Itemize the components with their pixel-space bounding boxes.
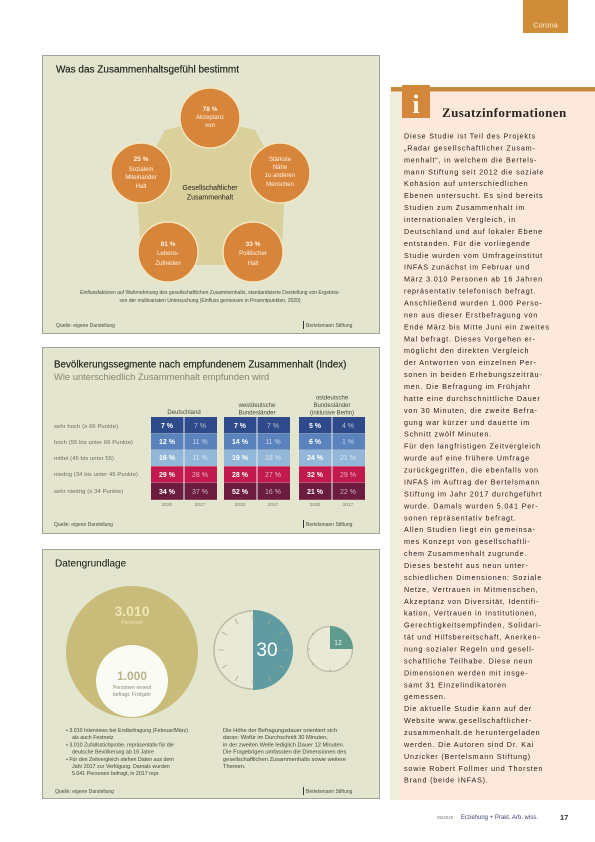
body text: schiedlichen Dimensionen: Soziale [404,573,542,582]
source: Quelle: eigene Darstellung [54,522,113,528]
circle: bottom left: 81 % [161,241,176,248]
body text: Deutschland und auf lokaler Ebene [404,227,543,236]
circle: left: 25 % [134,156,149,163]
circle: bottom right: 33 % [246,241,261,248]
body text: zusammenhalt.de heruntergeladen [404,728,540,737]
clock: 12 minutes: 12 [334,640,342,647]
nested circles: sample sizes: Personen erneut [113,685,152,691]
body text: Stiftung im Jahr 2017 durchgeführt [404,489,542,498]
column group: westdeutsche Bundesländer [224,403,290,508]
column group: Deutschland: 37 % [192,489,208,496]
column group: westdeutsche Bundesländer: 27 % [265,472,281,479]
body text: möglicht den direkten Vergleich [404,346,529,355]
body text: Ebenen untersucht. Es sind bereits [404,191,543,200]
clock: 12 minutes [307,626,353,672]
panel: Zusatzinformationen [390,85,595,800]
column group: westdeutsche Bundesländer: 52 % [232,489,249,496]
icon: info [402,85,430,119]
circle: right [250,143,310,203]
body text: gemessen. [404,692,447,701]
circle: right: Nähe [273,165,288,171]
body text: nung sozialer Regeln und gesell- [404,644,535,653]
duration note: in der zweiten Welle lediglich Dauer 12 Minuten. [223,742,345,748]
circle: top: von [205,123,215,129]
body text: tät und Hilfsbereitschaft, Anerken- [404,633,541,642]
column group: westdeutsche Bundesländer: westdeutsche [238,403,276,409]
column group: ostdeutsche Bundesländer: Bundesländer [313,403,351,409]
logo: Bertelsmann Stiftung [306,789,353,795]
column group: Deutschland: 11 % [192,455,208,462]
bullet list: • Für den Zeitvergleich stehen Daten aus dem [66,757,174,763]
circle: right: Menschen [266,182,294,188]
center label: Zusammenhalt [187,194,233,202]
circle: right: zu anderen [265,173,295,179]
heading: Bevölkerungssegmente nach empfundenem Zusammenhalt (Index) [54,360,346,370]
column group: westdeutsche Bundesländer: 11 % [265,439,281,446]
row labels: mittel (45 bis unter 55) [54,456,114,462]
panel: Bevölkerungssegmente [42,348,380,534]
clock: 30 minutes [214,610,293,690]
body text: von 30 Minuten, die zweite Befra- [404,406,538,415]
column group: westdeutsche Bundesländer: Bundesländer [238,410,276,416]
footer: journal line and page number [437,813,568,822]
panel: Datengrundlage [42,550,380,798]
circle: right: Stärkste [269,157,292,163]
heading: Zusatzinformationen [442,105,567,120]
column group: westdeutsche Bundesländer: 19 % [232,455,249,462]
column group: ostdeutsche Bundesländer: 22 % [340,489,356,496]
body text: Dieses besteht aus neun unter- [404,561,528,570]
circle: top: Akzeptanz [196,115,224,121]
column group: Deutschland: 16 % [159,455,176,462]
column group: westdeutsche Bundesländer: 18 % [265,455,281,462]
body text: sowie Robert Follmer und Thorsten [404,764,543,773]
subheading: Wie unterschiedlich Zusammenhalt empfunden wird [54,371,269,382]
row labels: niedrig (34 bis unter 45 Punkte) [54,472,138,478]
body text: zurückgegriffen, die ebenfalls von [404,466,539,475]
circle: top: 78 % [203,106,218,113]
body text: Für den langfristigen Zeitvergleich [404,442,541,451]
column group: westdeutsche Bundesländer: 28 % [232,472,249,479]
panel: Was das Zusammenhaltsgefühl bestimmt [42,56,380,334]
bullet list: deutsche Bevölkerung ab 16 Jahre [72,750,154,756]
circle: bottom left: Zufrieden [155,261,181,267]
body text: hatte eine durchschnittliche Dauer [404,394,541,403]
column group: westdeutsche Bundesländer: 7 % [267,423,279,430]
nested circles: sample sizes: 1.000 [117,669,147,683]
row labels: sehr hoch (≥ 66 Punkte) [54,424,118,430]
column group: ostdeutsche Bundesländer: 2017 [343,502,354,508]
body text: Dimensionen werden mit insge- [404,668,528,677]
bullet list: als auch Festnetz [72,735,114,741]
column group: westdeutsche Bundesländer: 2020 [235,502,246,508]
body text: menhalt“, in welchem die Bertels- [404,155,537,164]
body text: Kohäsion auf unterschiedlichen [404,179,528,188]
body text: Studie wurden vom Umfrageinstitut [404,251,543,260]
body text: Gerechtigkeitsempfinden, Solidari- [404,621,542,630]
column group: westdeutsche Bundesländer: 14 % [232,439,249,446]
caption: sen der multivariaten Untersuchung (Einfluss gemessen in Prozentpunkten, 2020) [119,298,301,304]
body text: mann Stiftung seit 2012 die soziale [404,167,544,176]
column group: Deutschland: 7 % [161,423,174,430]
body text: Allen Studien liegt ein gemeinsa- [404,525,536,534]
body text: gung war kürzer und dauerte im [404,418,530,427]
body text: men. Die Befragung im Frühjahr [404,382,531,391]
column group: ostdeutsche Bundesländer: 4 % [342,423,354,430]
circle: left: Halt [136,184,147,190]
body text: „Radar gesellschaftlicher Zusam- [404,143,536,152]
body text: Ende März bis Mitte Juni ein zweites [404,322,550,331]
logo: Bertelsmann Stiftung [306,522,353,528]
body text: schaftliche Teilhabe. Diese neun [404,656,533,665]
column group: westdeutsche Bundesländer: 16 % [265,489,281,496]
body text: INFAS im Auftrag der Bertelsmann [404,477,540,486]
column group: westdeutsche Bundesländer: 2017 [268,502,279,508]
column group: ostdeutsche Bundesländer: 2020 [310,502,321,508]
body text: chem Zusammenhalt zugrunde. [404,549,527,558]
center label: Gesellschaftlicher [182,185,238,192]
column group: westdeutsche Bundesländer: 7 % [234,423,247,430]
column group: Deutschland: 2020 [162,502,173,508]
column group: ostdeutsche Bundesländer: 24 % [307,455,324,462]
row labels: hoch (55 bis unter 66 Punkte) [54,440,133,446]
duration note: gesellschaftlichen Zusammenhalts sowie weitere [223,757,346,763]
body text: Diese Studie ist Teil des Projekts [404,132,536,140]
body text: sonen repräsentativ befragt. [404,513,516,522]
column group: ostdeutsche Bundesländer: 21 % [307,489,324,496]
circle: left: Miteinander [125,175,157,181]
column group: ostdeutsche Bundesländer: (inklusive Berlin) [310,410,354,416]
circle: bottom right [223,222,283,282]
body text: wurde auf eine frühere Umfrage [403,454,530,463]
body text: Studien zum Zusammenhalt im [404,203,525,212]
body text: INFAS zunächst im Februar und [404,263,530,272]
heading: Datengrundlage [55,558,127,570]
body text: sonen in beiden Erhebungszeiträu- [404,370,543,379]
body text: der Antworten von einzelnen Per- [404,358,537,367]
column group: Deutschland: 2017 [195,502,206,508]
footer: journal line and page number: Erziehung + Prakt. Arb. wiss. [461,815,538,821]
column group: Deutschland: 28 % [192,472,208,479]
duration note: Die Höhe der Befragungsdauer orientiert sich [223,728,337,734]
source: Quelle: eigene Darstellung [55,789,114,795]
bullet list: 5.041 Personen befragt, in 2017 repr. [72,771,160,777]
circle: bottom left: Lebens- [157,251,179,257]
column group: ostdeutsche Bundesländer: 5 % [309,423,322,430]
body text: Anschließend wurden 1.000 Perso- [404,299,543,308]
column group: Deutschland: Deutschland [167,410,201,416]
nested circles: sample sizes [66,586,198,718]
body text: März 3.010 Personen ab 16 Jahren [404,275,543,284]
circle: bottom right: Politischer [239,251,267,257]
body text: nen aus dieser Erstbefragung von [404,310,538,319]
column group: ostdeutsche Bundesländer: 21 % [340,455,356,462]
column group: Deutschland: 7 % [194,423,206,430]
body text: Unzicker (Bertelsmann Stiftung) [404,752,531,761]
body text: Die aktuelle Studie kann auf der [404,704,532,713]
column group: Deutschland: 29 % [159,472,176,479]
clock: 30 minutes: 30 [256,640,278,661]
circle: left: Sozialem [129,167,153,173]
body text: Website www.gesellschaftlicher- [404,716,532,725]
column group: ostdeutsche Bundesländer: 29 % [340,472,356,479]
bullet list: • 3.010 Zufallsstichprobe, repräsentativ für die [66,742,174,748]
caption: Einflussfaktoren auf Wahrnehmung des gesellschaftlichen Zusammenhalts, standardisierte Darstellung von Ergebnis- [80,290,340,296]
bullet list: Jahr 2017 zur Verfügung. Damals wurden [72,764,170,770]
row labels: sehr niedrig (≤ 34 Punkte) [54,489,123,495]
body text: Schnitt zwölf Minuten. [404,430,492,439]
circle: left [111,143,171,203]
body text: wurde. Damals wurden 5.041 Per- [403,501,538,510]
nested circles: sample sizes: Personen [121,620,143,626]
bullet list: • 3.010 Interviews bei Erstbefragung (Februar/März) [66,728,188,734]
duration note: Die Fragebögen umfassten die Dimensionen des [223,750,346,756]
column group: ostdeutsche Bundesländer: ostdeutsche [316,396,349,402]
body text: samt 31 Einzelindikatoren [404,680,507,689]
body text: werden. Die Autoren sind Dr. Kai [403,740,534,749]
circle: bottom left [138,222,198,282]
icon: info: i [412,90,420,119]
logo: Bertelsmann Stiftung [306,323,353,329]
column group: ostdeutsche Bundesländer: 1 % [342,439,354,446]
column group: Deutschland [151,410,217,508]
heading: Was das Zusammenhaltsgefühl bestimmt [56,64,239,76]
nested circles: sample sizes: 3.010 [114,603,150,619]
body text: Netze, Vertrauen in Mitmenschen, [404,585,539,594]
column group: Deutschland: 12 % [159,439,176,446]
body text: mes Konzept von gesellschaftli- [404,537,530,546]
pentagon background [136,124,285,265]
section tab: Corona [523,0,568,33]
row labels [54,424,138,495]
source: Quelle: eigene Darstellung [56,323,115,329]
circle: bottom right: Halt [248,261,259,267]
body text: Brand (beide INFAS). [404,776,489,785]
body text: repräsentativ telefonisch befragt. [404,287,536,296]
column group: ostdeutsche Bundesländer [299,396,365,508]
body text: Mal befragt. Dieses Vorgehen er- [404,334,536,343]
circle: top [180,88,240,148]
section tab: Corona: Corona [533,20,559,30]
body text: internationalen Vergleich, in [404,215,516,224]
body text: kation, Vertrauen in Institutionen, [404,609,537,618]
duration note: Themen. [223,764,246,770]
column group: ostdeutsche Bundesländer: 32 % [307,472,324,479]
nested circles: sample sizes: befragt, Frühjahr [113,692,151,698]
column group: Deutschland: 11 % [192,439,208,446]
duration note: daran: Wofür im Durchschnitt 30 Minuten, [223,735,328,741]
footer: journal line and page number: 05/2020 [437,815,454,820]
footer: journal line and page number: 17 [560,813,568,822]
column group: Deutschland: 34 % [159,489,176,496]
body text: entstanden. Für die vorliegende [404,239,531,248]
body text: Akzeptanz von Diversität, Identifi- [404,597,539,606]
column group: ostdeutsche Bundesländer: 6 % [309,439,322,446]
